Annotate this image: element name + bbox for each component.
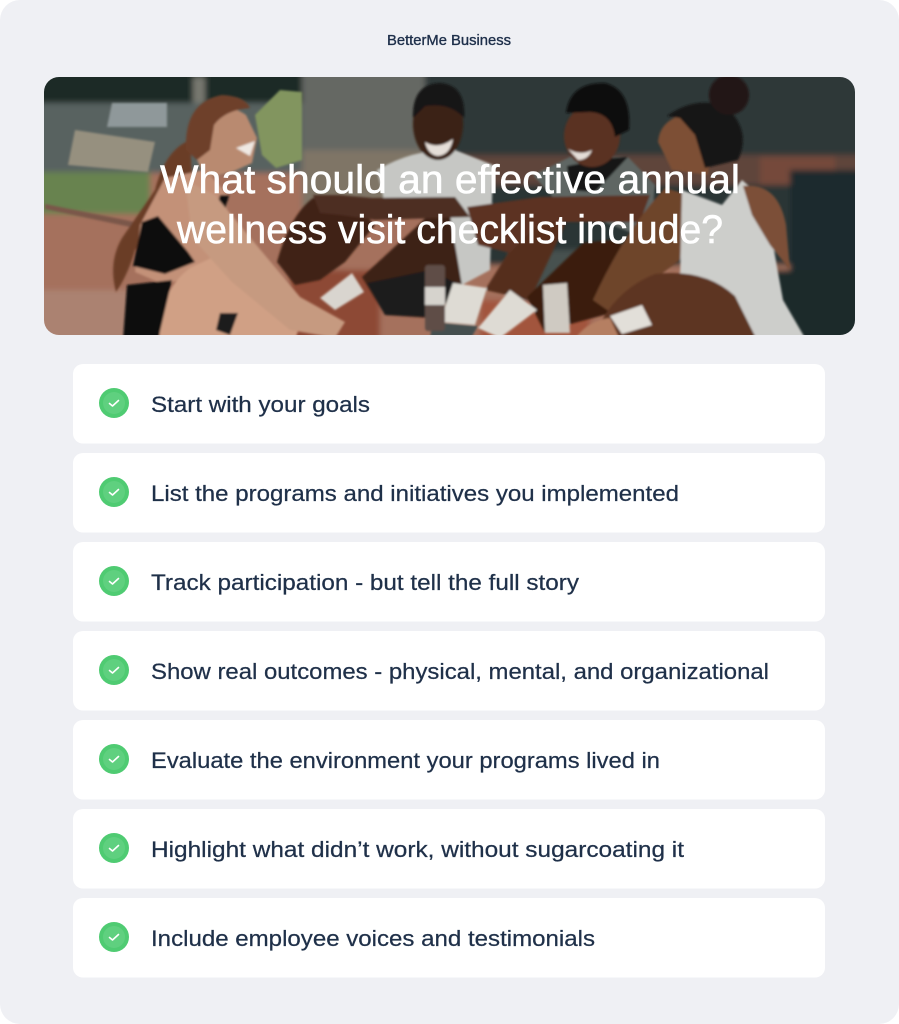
item 4 (73, 631, 825, 710)
bottle (425, 265, 445, 331)
item 2 (73, 453, 825, 532)
woman 1 head (192, 108, 257, 178)
man 2 shirt (533, 157, 655, 240)
hero photo (44, 77, 855, 335)
man 2 arm and hands (467, 195, 650, 253)
item 7 (73, 898, 825, 978)
item 4: Show real outcomes - physical, mental, and organizational (151, 659, 769, 684)
woman 1 arm (185, 180, 345, 338)
item 5 (73, 720, 825, 800)
man 2 head (564, 105, 620, 167)
man 1 shirt (377, 150, 493, 285)
item 1: Start with your goals (151, 392, 370, 417)
hero title (160, 158, 740, 252)
brand header: BetterMe Business (387, 33, 511, 49)
woman 3 arm (743, 186, 790, 270)
item 6 (73, 809, 825, 888)
hero title: What should an effective annual (160, 158, 740, 202)
checklist (73, 364, 825, 978)
hero title: wellness visit checklist include? (176, 208, 723, 252)
woman 3 head (658, 113, 712, 175)
woman 3 leg (602, 272, 756, 335)
man 1 arm (313, 195, 470, 220)
man 1 sock (320, 273, 364, 310)
man 1 head (412, 104, 464, 162)
man 1 near leg and shorts (361, 216, 462, 319)
bench and sign (107, 103, 167, 127)
man 2 socks (440, 283, 487, 325)
woman 1 torso (135, 170, 228, 285)
item 7: Include employee voices and testimonials (151, 926, 595, 951)
item 3: Track participation - but tell the full story (151, 570, 580, 595)
item 5: Evaluate the environment your programs lived in (151, 748, 660, 773)
item 1 (73, 364, 825, 444)
hero banner (44, 77, 855, 335)
plant (255, 90, 302, 168)
item 2: List the programs and initiatives you implemented (151, 481, 679, 506)
woman 1 ponytail (113, 140, 192, 292)
man 1 far leg (277, 198, 375, 285)
item 6: Highlight what didn’t work, without sugarcoating it (151, 837, 685, 862)
man 2 legs (485, 213, 565, 300)
woman 1 thigh (158, 259, 299, 335)
woman 3 far arm (593, 188, 690, 312)
woman 1 shorts (123, 280, 172, 340)
item 3 (73, 542, 825, 622)
woman 3 top (680, 180, 805, 338)
